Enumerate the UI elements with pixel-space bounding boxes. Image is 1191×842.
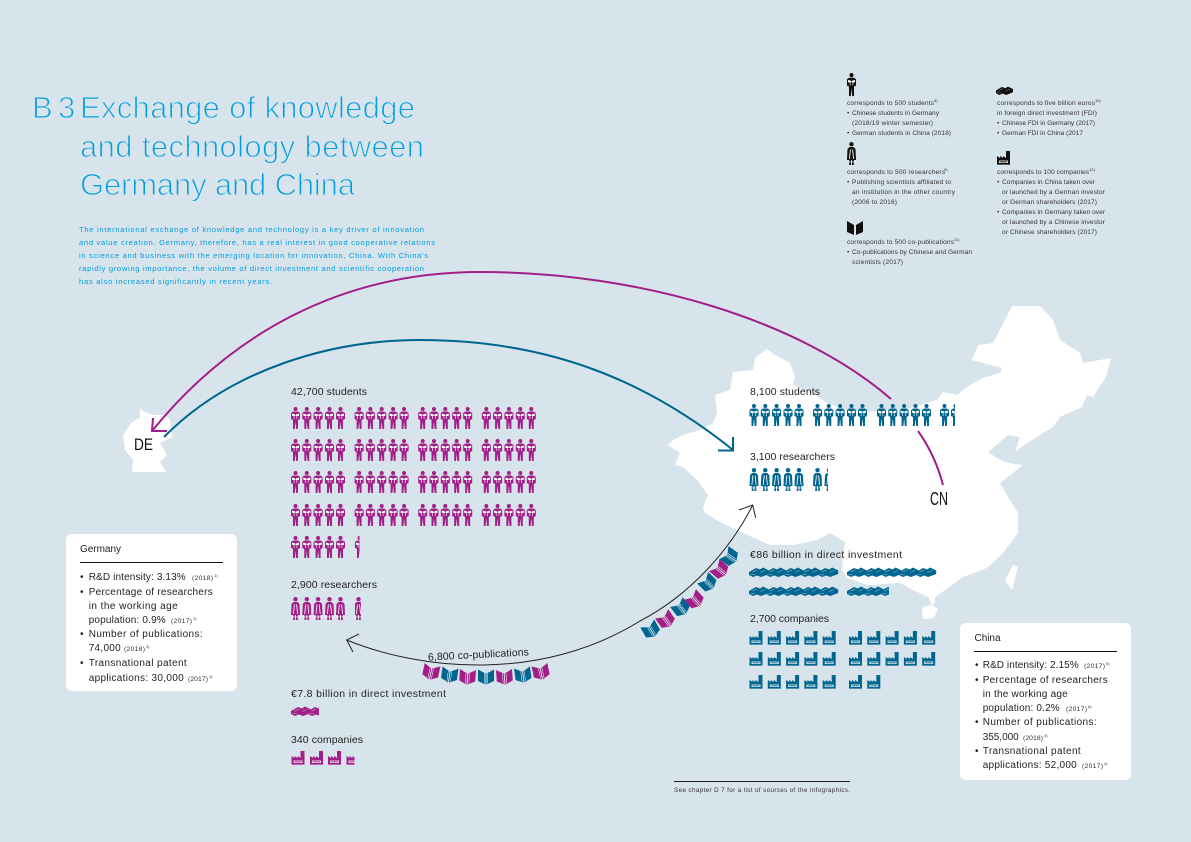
panel: Germany: applications: 30,000 (89, 673, 184, 684)
panel: Germany: 1) (214, 573, 218, 578)
German students group (291, 386, 536, 558)
panel: China: Number of publications: (983, 717, 1097, 728)
legend: companies: or launched by a German investor (1002, 189, 1106, 196)
legend: direct investment: German FDI in China (2017 (1002, 130, 1083, 137)
title: 3 (58, 90, 75, 125)
intro text: has also increased significantly in recent years. (79, 277, 272, 286)
panel: Germany: R&D intensity: 3.13% (89, 572, 186, 583)
label: CN: CN (930, 489, 948, 509)
legend: companies (997, 151, 1106, 236)
panel: China: 3) (1044, 733, 1048, 738)
panel: China: Transnational patent (983, 746, 1081, 757)
legend: direct investment (996, 86, 1101, 137)
legend: companies: corresponds to 100 companies (997, 169, 1090, 176)
arrow: students from Germany to China (164, 340, 733, 450)
title: Germany and China (80, 167, 356, 202)
panel: China: 6) (1088, 704, 1092, 709)
panel: Germany: (2017) (188, 676, 208, 683)
legend: companies: Companies in Germany taken over (1002, 209, 1106, 216)
panel: Germany: 4) (209, 674, 213, 679)
researchers in China: 3,100 researchers (750, 451, 835, 463)
legend: co-publications: scientists (2017) (852, 259, 903, 266)
arrow: students from China to Germany (152, 272, 943, 485)
footnote: See chapter D 7 for a list of sources of the infographics. (674, 787, 850, 794)
companies in China (750, 613, 935, 689)
panel: China: • (975, 746, 979, 757)
panel: Germany: 74,000 (89, 643, 121, 654)
legend: students: German students in China (2018) (852, 130, 951, 137)
label: DE: DE (134, 436, 153, 454)
students in China: 8,100 students (750, 386, 820, 398)
panel: Germany: Percentage of researchers (89, 587, 213, 598)
panel: Germany: Transnational patent (89, 658, 187, 669)
legend: co-publications: • (847, 249, 850, 256)
companies in China: 2,700 companies (750, 613, 829, 625)
panel: China: • (975, 660, 979, 671)
companies in Germany (291, 734, 363, 765)
map: Germany (123, 409, 172, 472)
investment in China (749, 549, 936, 596)
panel: Germany: • (80, 587, 84, 598)
investment in Germany: €7.8 billion in direct investment (291, 688, 446, 700)
legend: co-publications: 11) (954, 237, 960, 242)
intro text (79, 225, 435, 286)
panel: China: 5) (1106, 661, 1110, 666)
panel: Germany: • (80, 658, 84, 669)
panel: China: Percentage of researchers (983, 675, 1108, 686)
legend: students: (2018/19 winter semester) (852, 120, 933, 127)
legend: researchers: • (847, 179, 850, 186)
panel: China: (2017) (1084, 663, 1105, 670)
legend: direct investment: 10) (1095, 98, 1101, 103)
panel: Germany: population: 0.9% (89, 615, 166, 626)
panel: Germany: in the working age (89, 601, 178, 612)
panel: Germany: Germany (80, 544, 121, 555)
legend: students (847, 73, 951, 137)
panel: China: R&D intensity: 2.15% (983, 660, 1079, 671)
legend: companies: or German shareholders (2017) (1002, 199, 1097, 206)
title (32, 90, 424, 202)
legend: direct investment: • (997, 130, 1000, 137)
panel: Germany: (2017) (171, 618, 192, 625)
panel: Germany: • (80, 629, 84, 640)
legend: co-publications: Co-publications by Chinese and German (852, 249, 972, 256)
intro text: in science and business with the emerging location for innovation, China. With China's (79, 251, 428, 260)
title: B (32, 90, 53, 125)
panel: Germany: 3) (146, 644, 150, 649)
panel: China: (2017) (1082, 763, 1103, 770)
intro text: The international exchange of knowledge and technology is a key driver of innovation (79, 225, 424, 234)
panel: Germany (66, 534, 237, 691)
legend: companies: or launched by a Chinese investor (1002, 219, 1106, 226)
panel: China: • (975, 675, 979, 686)
intro text: and value creation. Germany, therefore, has a real interest in good cooperative relations (79, 238, 435, 247)
legend: researchers: an institution in the other country (852, 189, 956, 196)
legend: students: • (847, 130, 850, 137)
panel: China: in the working age (983, 689, 1068, 700)
legend: direct investment: in foreign direct investment (FDI) (997, 110, 1097, 117)
panel: China: (2017) (1066, 706, 1087, 713)
legend: direct investment: Chinese FDI in Germany (2017) (1002, 120, 1095, 127)
panel: Germany: (2018) (192, 575, 213, 582)
investment in Germany (291, 688, 446, 716)
legend: researchers: (2006 to 2016) (852, 199, 897, 206)
investment in China: €86 billion in direct investment (750, 549, 902, 561)
legend: companies: or Chinese shareholders (2017) (1002, 229, 1097, 236)
researchers in Germany (291, 579, 377, 620)
legend: students: 8) (934, 98, 938, 103)
panel: China: 4) (1104, 761, 1108, 766)
students in China (750, 386, 960, 426)
panel: China: (2018) (1023, 735, 1043, 742)
legend: companies: 12) (1089, 167, 1095, 172)
panel: Germany: (2018) (124, 646, 145, 653)
panel: China: population: 0.2% (983, 703, 1060, 714)
panel: China (960, 623, 1131, 780)
German students group: 42,700 students (291, 386, 367, 398)
researchers in China (750, 451, 835, 491)
legend: researchers: 9) (944, 167, 948, 172)
legend: co-publications (847, 221, 972, 266)
legend: co-publications: corresponds to 500 co-publications (847, 239, 955, 246)
legend: companies: • (997, 179, 1000, 186)
books along bottom of arc (422, 663, 550, 685)
panel: China: • (975, 717, 979, 728)
legend: students: • (847, 110, 850, 117)
legend: researchers: Publishing scientists affiliated to (852, 179, 951, 186)
panel: China: applications: 52,000 (983, 760, 1077, 771)
legend: students: Chinese students in Germany (852, 110, 940, 117)
researchers in Germany: 2,900 researchers (291, 579, 377, 591)
panel: China: China (974, 633, 1001, 644)
panel: Germany: • (80, 572, 84, 583)
intro text: rapidly growing importance, the volume of direct investment and scientific cooperation (79, 264, 424, 273)
legend: students: corresponds to 500 students (847, 100, 935, 107)
title: and technology between (80, 129, 424, 164)
books along rising arc (640, 546, 741, 640)
map: China (668, 306, 1111, 619)
legend: direct investment: corresponds to five billion euros (997, 100, 1096, 107)
panel: Germany: 2) (193, 616, 197, 621)
legend: researchers (847, 142, 956, 206)
panel: Germany: Number of publications: (89, 629, 203, 640)
label: 6,800 co-publications: 6,800 co-publications (428, 646, 529, 664)
legend: companies: Companies in China taken over (1002, 179, 1096, 186)
companies in Germany: 340 companies (291, 734, 363, 746)
legend: direct investment: • (997, 120, 1000, 127)
legend: researchers: corresponds to 500 researchers (847, 169, 946, 176)
arrow: co-publications (347, 505, 756, 665)
panel: China: 355,000 (983, 732, 1019, 743)
title: Exchange of knowledge (80, 90, 415, 125)
legend: companies: • (997, 209, 1000, 216)
